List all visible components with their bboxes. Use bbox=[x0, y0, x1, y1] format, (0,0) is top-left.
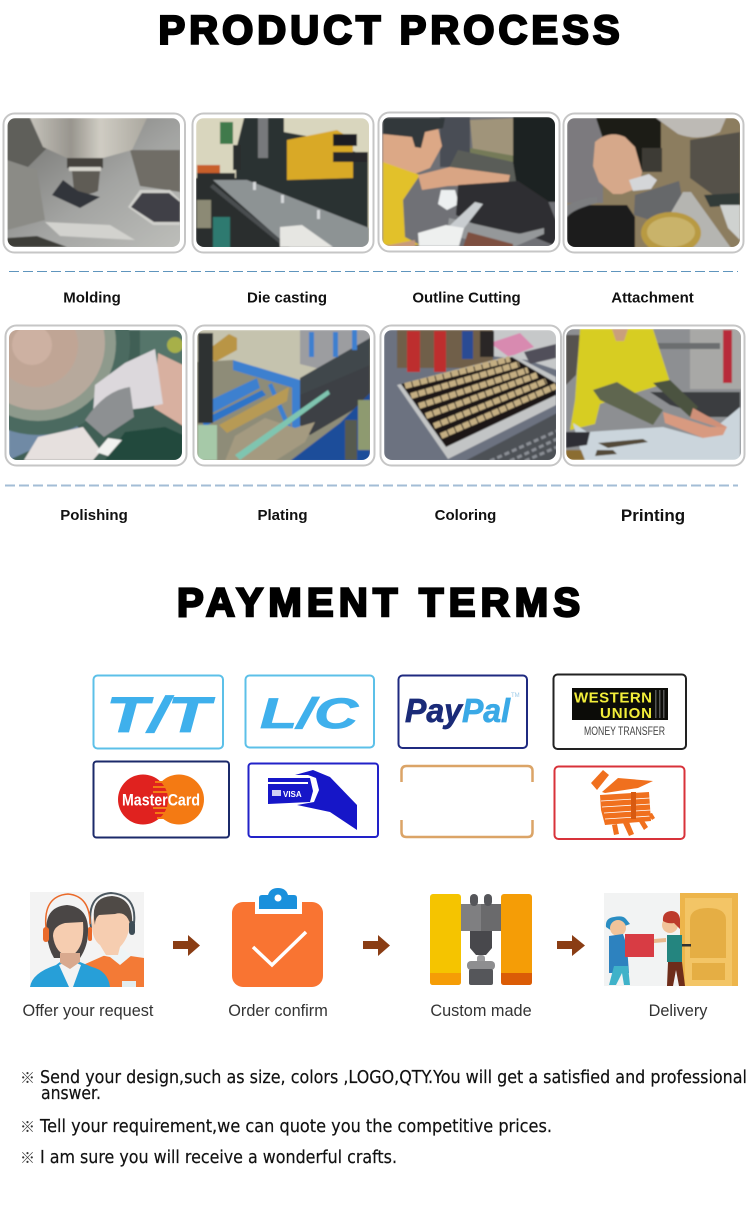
label: coloring: Coloring bbox=[435, 507, 496, 524]
payment card: T/T: T/T bbox=[106, 687, 216, 743]
payment card: Western Union: MONEY TRANSFER bbox=[584, 724, 665, 738]
caption: custom made: Custom made bbox=[430, 1002, 532, 1020]
arrow: step 1 to 2 bbox=[173, 935, 200, 956]
step icon: delivery at door bbox=[604, 893, 738, 986]
panel: outline cutting photo bbox=[378, 112, 560, 252]
panel: plating photo bbox=[194, 326, 374, 466]
payment card: Western Union bbox=[554, 674, 686, 749]
payment card: L/C bbox=[246, 676, 374, 748]
label: plating: Plating bbox=[257, 507, 308, 524]
caption: order confirm: Order confirm bbox=[228, 1002, 328, 1020]
label: outline cutting: Outline Cutting bbox=[412, 290, 521, 306]
payment card: blank frame bbox=[402, 766, 532, 837]
label: printing: Printing bbox=[621, 506, 685, 525]
step icon: press machine bbox=[430, 894, 532, 985]
note: wonderful crafts: I am sure you will receive a wonderful crafts. bbox=[40, 1147, 397, 1168]
arrow: step 2 to 3 bbox=[363, 935, 390, 956]
payment card: Western Union: UNION bbox=[600, 705, 652, 722]
payment card: MasterCard: MasterCard bbox=[122, 790, 200, 810]
panel: attachment photo bbox=[564, 114, 744, 254]
panel: printing photo bbox=[564, 326, 744, 466]
label: molding: Molding bbox=[63, 290, 121, 306]
panel: molding photo bbox=[4, 114, 185, 252]
panel: coloring photo bbox=[380, 326, 561, 466]
payment card: L/C: L/C bbox=[260, 690, 359, 738]
step icon: support agents bbox=[30, 892, 144, 987]
payment card: PayPal: TM bbox=[511, 693, 520, 699]
payment card: PayPal: PayPal bbox=[405, 692, 511, 729]
title: payment terms: PAYMENT TERMS bbox=[177, 581, 580, 625]
note: tell your requirement: ※ bbox=[20, 1119, 35, 1136]
note: send your design: ※ bbox=[20, 1070, 35, 1087]
caption: offer your request: Offer your request bbox=[23, 1002, 154, 1020]
panel: polishing photo bbox=[4, 324, 188, 466]
arrow: step 3 to 4 bbox=[557, 935, 585, 956]
label: die casting: Die casting bbox=[247, 290, 327, 306]
note: wonderful crafts: ※ bbox=[20, 1150, 35, 1167]
payment card: T/T bbox=[94, 676, 223, 748]
payment card: Visa credit card in hand: VISA bbox=[283, 790, 302, 799]
note: send your design: answer. bbox=[41, 1083, 101, 1104]
panel: die casting photo bbox=[192, 114, 374, 252]
payment card: Visa credit card in hand bbox=[248, 764, 378, 837]
payment card: PayPal bbox=[398, 676, 527, 748]
step icon: order clipboard bbox=[232, 888, 323, 987]
note: tell your requirement: Tell your requirement,we can quote you the competitive prices. bbox=[39, 1116, 552, 1137]
payment card: Western Union: WESTERN bbox=[574, 690, 652, 706]
payment card: cash in hand bbox=[554, 766, 684, 839]
label: attachment: Attachment bbox=[611, 290, 694, 306]
caption: delivery: Delivery bbox=[649, 1002, 708, 1020]
payment card: MasterCard bbox=[94, 762, 229, 838]
title: product process: PRODUCT PROCESS bbox=[158, 8, 620, 52]
note: send your design bbox=[20, 1067, 747, 1104]
label: polishing: Polishing bbox=[60, 507, 128, 524]
